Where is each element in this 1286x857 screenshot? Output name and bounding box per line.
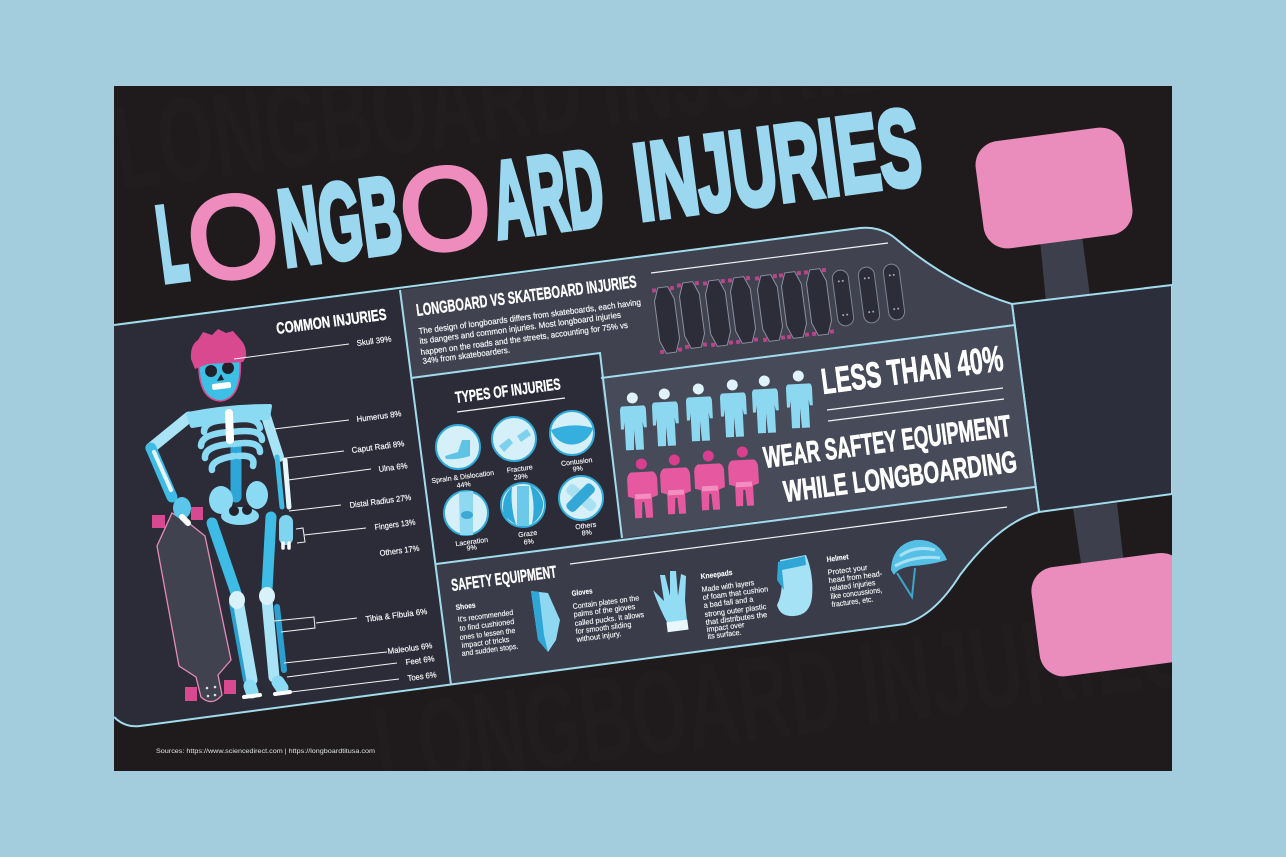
bottom truck post <box>1073 503 1124 564</box>
label: caput radi: Caput Radi 8% <box>351 439 405 455</box>
icon: fracture <box>492 417 536 461</box>
label: graze: 6% <box>523 538 534 547</box>
text: kneepads: Made with layers <box>701 578 755 594</box>
stat lines <box>827 388 1004 421</box>
title: NGB <box>272 153 408 289</box>
text: gloves <box>571 586 645 644</box>
text: helmet: Helmet <box>826 552 849 564</box>
pictogram: pink people <box>626 446 760 519</box>
divider line <box>651 243 888 273</box>
label: ulna: Ulna 6% <box>378 461 408 474</box>
heading: safety equipment: SAFETY EQUIPMENT <box>450 562 558 595</box>
label: fracture: 29% <box>513 473 528 482</box>
text: helmet: Protect your <box>827 563 868 577</box>
label: others: Others 17% <box>379 544 420 558</box>
text: kneepads: its surface. <box>707 628 742 641</box>
text: kneepads: strong outer plastic <box>704 602 767 619</box>
sources: Sources: https://www.sciencedirect.com | https://longboardtitusa.com <box>156 748 375 755</box>
body text: happen on the roads and the streets, accounting for 75% vs <box>420 320 628 357</box>
text: helmet <box>826 552 883 609</box>
text: kneepads: Kneepads <box>700 568 733 581</box>
label: others <box>575 522 597 538</box>
text: gloves: called pucks. It allows <box>574 610 645 628</box>
label: contusion: 9% <box>572 465 583 474</box>
label: contusion <box>561 457 593 474</box>
panel: types of injuries <box>431 376 603 553</box>
icon: kneepad <box>777 555 812 616</box>
text: gloves: palms of the gloves <box>573 602 636 619</box>
text: gloves: without injury. <box>575 629 622 644</box>
icon: others bandage <box>559 476 603 520</box>
label: fracture <box>506 464 533 482</box>
top wheel <box>973 125 1135 251</box>
body text: 34% from skateboarders. <box>422 345 511 366</box>
text: shoes <box>455 600 519 658</box>
title: L <box>150 181 194 305</box>
title: ARD <box>485 126 610 261</box>
text: helmet: related injuries <box>829 578 876 593</box>
pictogram: blue people <box>619 370 814 451</box>
panel: safety equipment background <box>436 487 1039 685</box>
text: kneepads: that distributes the <box>705 610 768 627</box>
text: wear safety equipment: WEAR SAFTEY EQUIPMENT <box>762 410 1013 475</box>
skeleton illustration <box>151 329 290 697</box>
title: O <box>180 166 287 307</box>
poster panel <box>114 86 1172 771</box>
pictogram: longboards and skateboards <box>652 263 906 354</box>
text: shoes: ones to lessen the <box>459 626 516 642</box>
icon: laceration <box>444 491 488 535</box>
panel: common injuries <box>151 307 437 702</box>
label: malleolus: Maleolus 6% <box>387 641 433 656</box>
icon: graze <box>501 483 545 527</box>
label: humerus: Humerus 8% <box>356 409 402 424</box>
text: helmet: fractures, etc. <box>831 595 874 609</box>
icon: glove <box>653 571 689 632</box>
text: gloves: Gloves <box>571 586 593 598</box>
heading: types of injuries: TYPES OF INJURIES <box>454 376 562 407</box>
text: helmet: like concussions, <box>830 585 883 601</box>
label: feet: Feet 6% <box>405 654 435 667</box>
title <box>154 107 922 285</box>
text: while longboarding: WHILE LONGBOARDING <box>782 446 1019 509</box>
text: gloves: Contain plates on the <box>572 593 640 611</box>
label: tibia and fibula: Tibia & Fibula 6% <box>365 607 428 624</box>
label: toes: Toes 6% <box>407 670 437 683</box>
body text <box>418 297 642 366</box>
stat: less than 40 percent: LESS THAN 40% <box>819 337 1005 402</box>
label: fracture: Fracture <box>506 464 533 475</box>
text: kneepads: of foam that cushion <box>702 584 769 602</box>
text: kneepads: impact over <box>706 620 745 634</box>
label: sprain and dislocation: 44% <box>456 481 471 490</box>
heading: longboard vs skateboard: LONGBOARD VS SKATEBOARD INJURIES <box>415 272 638 320</box>
label: distal radius: Distal Radius 27% <box>349 493 412 510</box>
panel: less than 40 percent background <box>601 325 1035 538</box>
longboard illustration <box>152 507 236 702</box>
text: kneepads <box>700 568 769 641</box>
text: shoes: and sudden stops. <box>461 642 519 658</box>
injury leader lines <box>234 344 399 692</box>
title: O <box>392 138 499 279</box>
label: skull: Skull 39% <box>356 334 392 348</box>
body text: its dangers and common injuries. Most longboard injuries <box>419 310 622 346</box>
title: INJURIES <box>627 85 928 243</box>
text: shoes: to find cushioned <box>459 617 515 633</box>
panel: longboard vs skateboard <box>415 243 906 366</box>
text: shoes: impact of tricks <box>461 635 510 650</box>
bottom wheel <box>1031 553 1172 676</box>
icon: shoe <box>531 591 560 652</box>
text: shoes: Shoes <box>455 600 476 612</box>
label: graze: Graze <box>518 530 538 539</box>
panel: longboard vs skateboard background <box>400 228 1015 378</box>
icon: contusion <box>550 411 594 455</box>
text: helmet: head from head- <box>828 569 883 585</box>
icon: helmet <box>891 540 947 597</box>
ghost background pattern text <box>115 134 1172 728</box>
label: contusion: Contusion <box>561 457 593 468</box>
label: others: Others <box>575 522 597 531</box>
label: sprain and dislocation: Sprain & Dislocation <box>431 470 495 485</box>
text: shoes: It's recommended <box>457 608 514 624</box>
board outlines <box>114 228 1039 726</box>
board deck <box>114 256 647 726</box>
label: fingers: Fingers 13% <box>374 518 416 532</box>
truck band <box>1012 285 1172 512</box>
label: graze <box>518 530 538 547</box>
text: gloves: for smooth sliding <box>575 620 632 636</box>
body text: The design of longboards differs from skateboards, each having <box>418 297 642 336</box>
panel: safety equipment <box>450 507 1007 658</box>
label: laceration: Laceration <box>455 537 489 548</box>
label: others: 8% <box>581 529 592 538</box>
icon: sprain and dislocation <box>436 425 480 469</box>
text: kneepads: a bad fall and a <box>703 594 755 610</box>
heading: common injuries: COMMON INJURIES <box>275 307 388 338</box>
top truck post <box>1040 236 1090 302</box>
panel: less than 40 percent <box>619 337 1019 519</box>
label: laceration: 9% <box>466 544 477 553</box>
